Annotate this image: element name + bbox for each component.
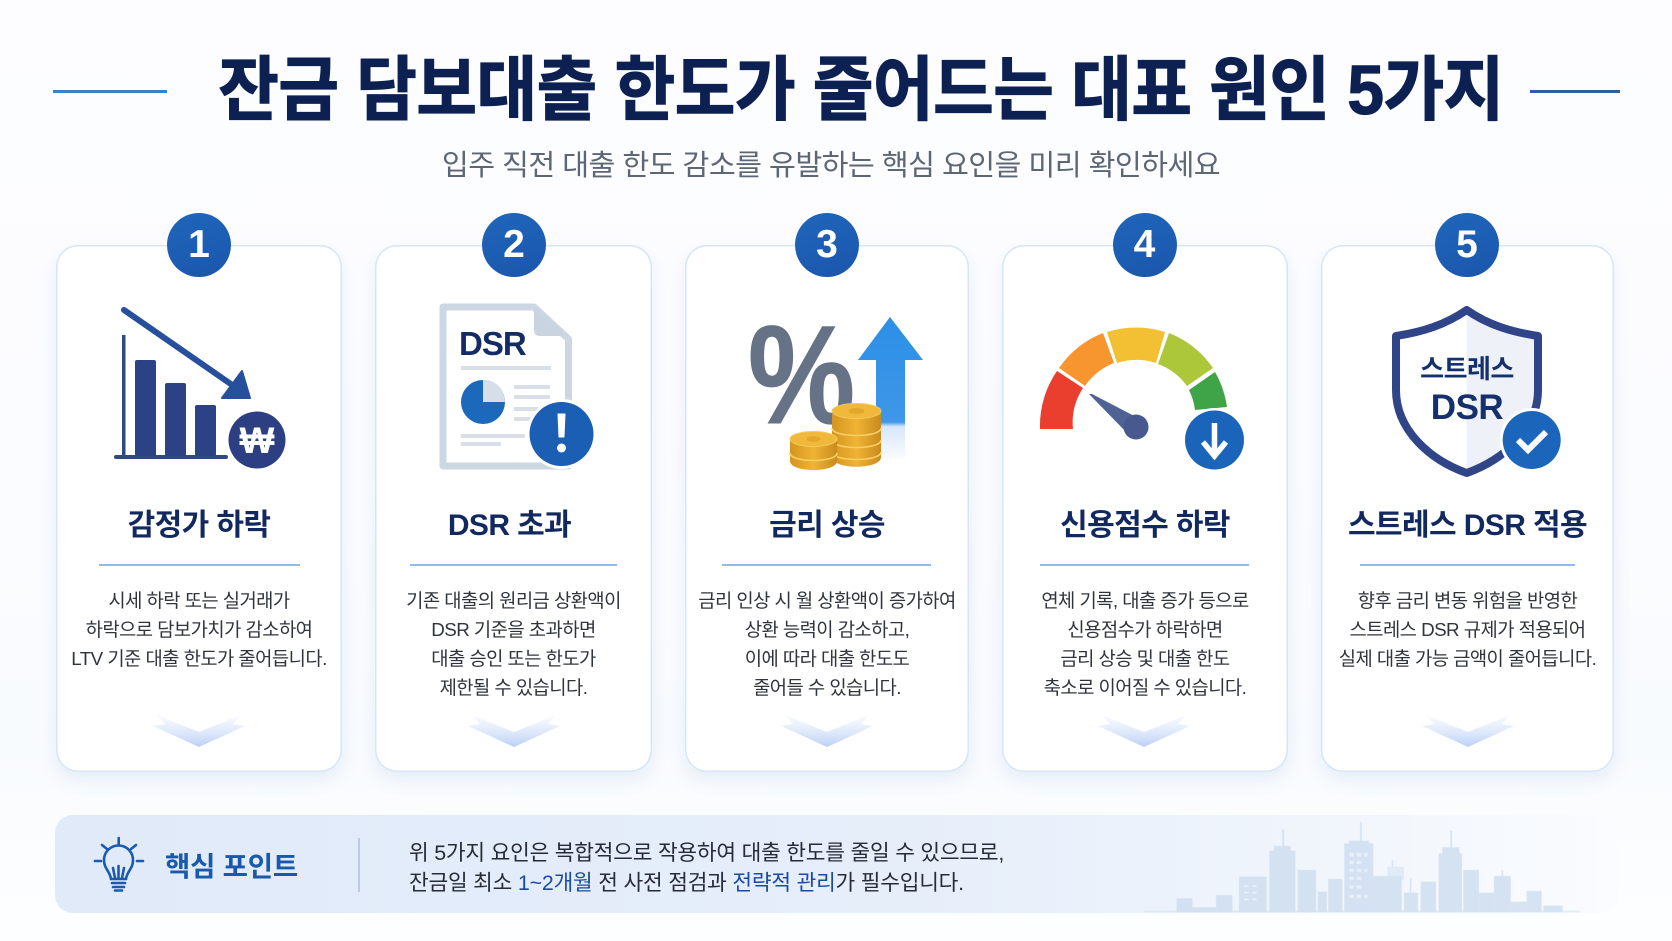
icon: down chevron xyxy=(154,716,244,747)
number badge 3: 3 xyxy=(816,223,838,266)
number badge 2: 2 xyxy=(503,223,525,266)
description: 대출 승인 또는 한도가 xyxy=(431,648,596,669)
panel: card 5 stress DSR xyxy=(1321,245,1614,772)
description: LTV 기준 대출 한도가 줄어듭니다. xyxy=(71,648,327,669)
heading: 스트레스 DSR 적용 xyxy=(1348,509,1587,542)
heading: 금리 상승 xyxy=(769,509,885,542)
icon: percent, rising arrow, coins: % xyxy=(748,296,855,453)
description: 실제 대출 가능 금액이 줄어듭니다. xyxy=(1339,648,1596,669)
icon: down chevron xyxy=(1098,716,1190,747)
icon: down chevron xyxy=(1422,716,1514,747)
description: 금리 상승 및 대출 한도 xyxy=(1060,648,1230,669)
panel: card 4 credit score drop xyxy=(1002,245,1288,772)
panel: card 2 DSR excess xyxy=(375,245,652,772)
heading: 신용점수 하락 xyxy=(1060,509,1230,542)
title: 잔금 담보대출 한도가 줄어드는 대표 원인 5가지 xyxy=(218,51,1504,129)
description: 향후 금리 변동 위험을 반영한 xyxy=(1358,590,1577,611)
subtitle: 입주 직전 대출 한도 감소를 유발하는 핵심 요인을 미리 확인하세요 xyxy=(442,150,1220,182)
description: 기존 대출의 원리금 상환액이 xyxy=(406,590,621,611)
icon: falling bar chart with won coin xyxy=(114,307,286,468)
description: 시세 하락 또는 실거래가 xyxy=(108,590,290,611)
icon: credit gauge with down arrow xyxy=(1040,328,1244,470)
description: 신용점수가 하락하면 xyxy=(1067,619,1223,640)
text block: key point message: 잔금일 최소 1~2개월 전 사전 점검과 전략적 관리가 필수입니다. xyxy=(409,870,964,894)
description xyxy=(1041,590,1249,698)
panel: key point banner xyxy=(55,815,1618,913)
icon: down chevron xyxy=(468,716,560,747)
icon: stress DSR shield with check: DSR xyxy=(1431,388,1503,427)
icon: stress DSR shield with check: 스트레스 xyxy=(1420,354,1514,384)
description xyxy=(698,590,956,698)
description xyxy=(406,590,621,698)
description xyxy=(1339,590,1596,669)
number badge 3 xyxy=(795,213,859,277)
icon: stress DSR shield with check xyxy=(1392,306,1561,477)
number badge 2 xyxy=(482,213,546,277)
panel: card 1 appraisal drop xyxy=(56,245,342,772)
text block: key point message: 위 5가지 요인은 복합적으로 작용하여 대출 한도를 줄일 수 있으므로, xyxy=(409,841,1004,865)
decorative line: title right xyxy=(1530,90,1620,92)
text block: key point message xyxy=(409,841,1004,894)
description xyxy=(71,590,327,669)
panel: card 3 rate rise xyxy=(685,245,969,772)
heading: DSR 초과 xyxy=(448,509,571,542)
heading: key point: 핵심 포인트 xyxy=(165,851,298,882)
illustration: city skyline xyxy=(1144,822,1580,912)
icon: DSR document with alert xyxy=(440,304,594,470)
description: 이에 따라 대출 한도도 xyxy=(745,648,909,669)
description: 제한될 수 있습니다. xyxy=(440,677,587,698)
description: DSR 기준을 초과하면 xyxy=(431,619,596,640)
description: 축소로 이어질 수 있습니다. xyxy=(1044,677,1246,698)
number badge 1: 1 xyxy=(188,223,210,266)
description: 연체 기록, 대출 증가 등으로 xyxy=(1041,590,1249,611)
icon: percent, rising arrow, coins xyxy=(748,296,923,470)
description: 스트레스 DSR 규제가 적용되어 xyxy=(1349,619,1586,640)
description: 줄어들 수 있습니다. xyxy=(753,677,901,698)
description: 금리 인상 시 월 상환액이 증가하여 xyxy=(698,590,956,611)
icon: DSR document with alert: DSR xyxy=(459,325,527,362)
heading: 감정가 하락 xyxy=(128,509,270,542)
description: 하락으로 담보가치가 감소하여 xyxy=(86,619,312,640)
icon: light bulb xyxy=(94,836,144,892)
number badge 4 xyxy=(1112,213,1176,277)
number badge 5: 5 xyxy=(1456,223,1478,266)
number badge 4: 4 xyxy=(1134,223,1155,266)
number badge 5 xyxy=(1435,213,1499,277)
number badge 1 xyxy=(167,213,231,277)
decorative line: title left xyxy=(53,90,167,92)
icon: falling bar chart with won coin: ₩ xyxy=(240,420,275,461)
icon: down chevron xyxy=(782,716,872,747)
description: 상환 능력이 감소하고, xyxy=(745,619,909,640)
